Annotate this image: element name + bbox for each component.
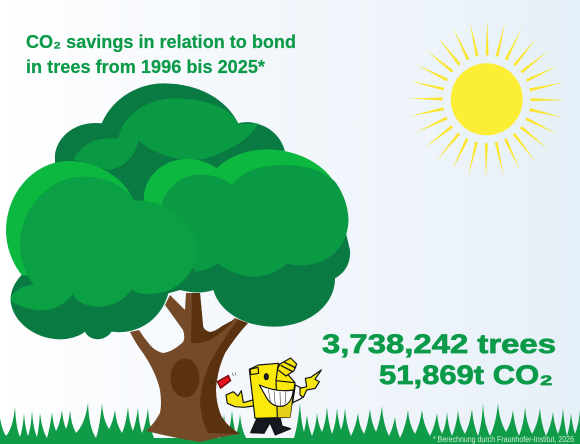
statistics: 51,869t CO₂ [379, 360, 553, 390]
title [26, 31, 296, 77]
mascot legs [251, 417, 291, 435]
grass [0, 403, 580, 444]
mascot mouth [259, 385, 293, 406]
mascot cap [277, 358, 297, 376]
mascot eye [264, 374, 268, 380]
mascot [210, 358, 321, 435]
statistics [322, 329, 556, 390]
statistics: 3,738,242 trees [322, 329, 556, 359]
mascot arm left [226, 391, 255, 407]
icon: sun [408, 20, 566, 178]
tree [6, 83, 350, 442]
mascot side panel [277, 405, 292, 417]
trunk knot [170, 358, 200, 398]
trunk [130, 293, 248, 442]
mascot arm right [293, 385, 304, 403]
red object [217, 375, 231, 388]
title: CO₂ savings in relation to bond [26, 31, 296, 52]
mascot handle [250, 367, 259, 375]
trunk shadow [191, 293, 248, 434]
mascot body [249, 363, 295, 418]
title: in trees from 1996 bis 2025* [26, 56, 266, 77]
foliage [6, 83, 350, 339]
